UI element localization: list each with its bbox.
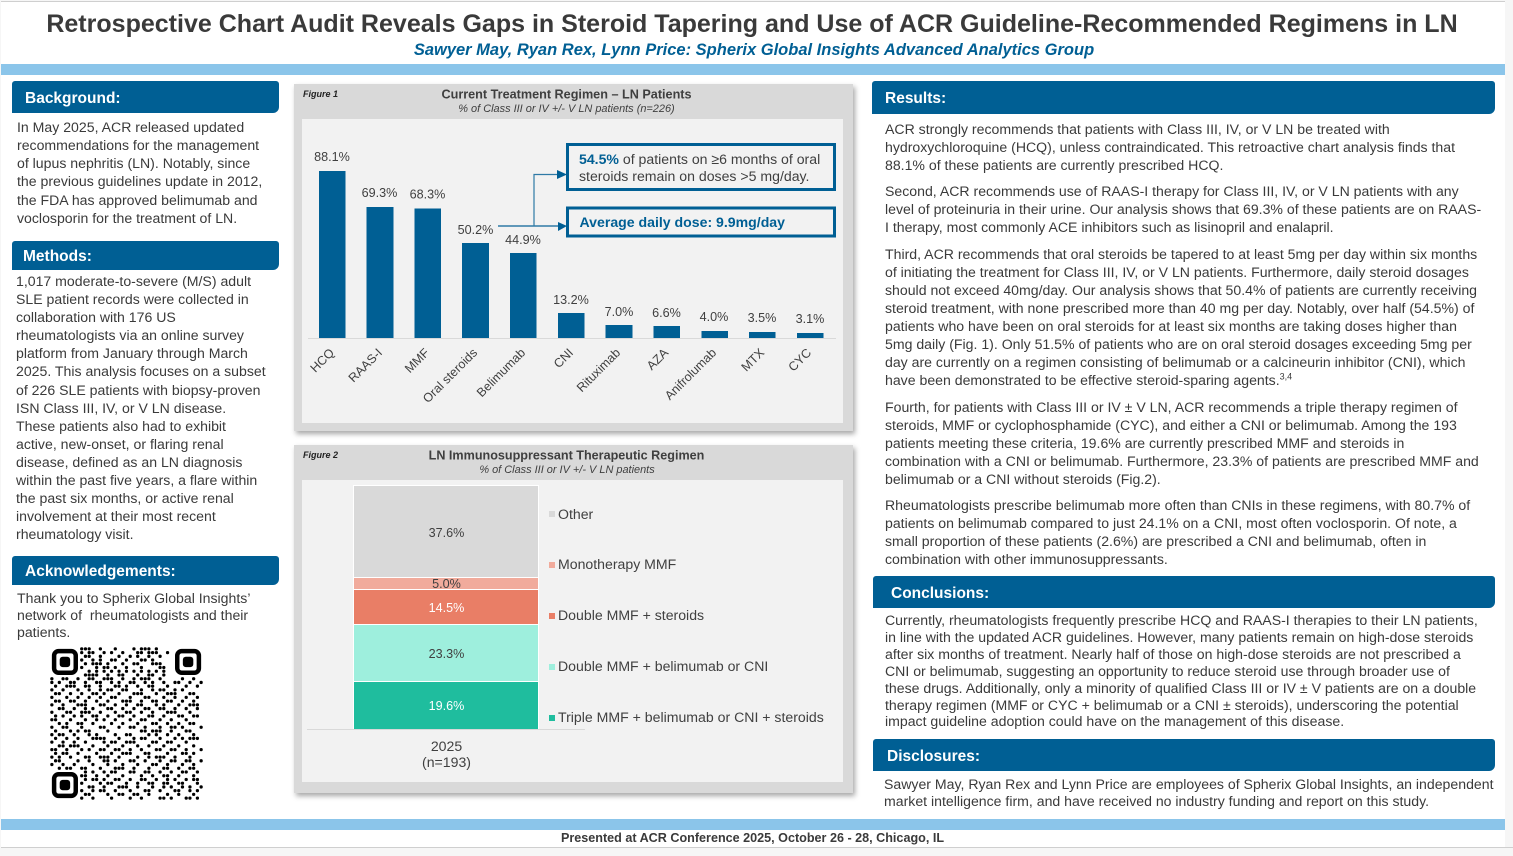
text: methods: active, new-onset, or flaring renal (16, 436, 224, 452)
text: methods: These patients also had to exhibit (16, 418, 226, 434)
category labels: CYC (786, 346, 814, 374)
text: conclusions: therapy regimen (MMF or CYC + belimumab or a CNI ± steroids), underscoring the potential (885, 697, 1459, 713)
text: methods: ISN Class III, IV, or V LN disease. (16, 400, 226, 416)
text: conclusions: these drugs. Additionally, only a minority of qualified Class III or IV ± V patients are on a double (885, 680, 1476, 696)
text: methods: the past six months, or active renal (16, 490, 234, 506)
segment labels: 5.0% (432, 577, 461, 591)
figure 2 label: Figure 2 (303, 450, 338, 460)
text: disclosures: market intelligence firm, and have received no industry funding and report on this study. (884, 793, 1429, 809)
text: background: recommendations for the management (17, 137, 259, 153)
heading: methods: Methods: (23, 248, 92, 265)
stacked bar (354, 486, 538, 730)
category labels: CNI (551, 346, 576, 371)
figure 1 title: Current Treatment Regimen – LN Patients (441, 88, 692, 102)
segment labels: 14.5% (429, 601, 464, 615)
bar value labels: 3.5% (748, 311, 776, 325)
panel: figure 1 (294, 84, 853, 431)
category labels: AZA (644, 345, 672, 373)
panel: figure 2 (294, 445, 853, 793)
category labels: Anifrolumab (662, 346, 719, 403)
text: results: hydroxychloroquine (HCQ), unless contraindicated. This retroactive chart analysis finds that (885, 139, 1455, 155)
segment labels: 19.6% (429, 699, 464, 713)
bar value labels: 3.1% (796, 312, 824, 326)
segment labels (429, 526, 464, 713)
callout: steroid doses (568, 144, 834, 190)
text: results (885, 121, 1481, 567)
legend: Double MMF + steroids (558, 607, 704, 623)
chart: immunosuppressant regimen: (n=193) (422, 754, 471, 770)
category labels: MTX (739, 345, 768, 374)
text: background: of lupus nephritis (LN). Notably, since (17, 155, 250, 171)
text: methods: disease, defined as an LN diagnosis (16, 454, 242, 470)
legend: Double MMF + belimumab or CNI (558, 658, 768, 674)
text: results: steroid treatment, with none prescribed more than 40 mg per day. Notably, over half (54.5%) of (885, 300, 1474, 316)
bar value labels: 7.0% (605, 305, 633, 319)
text: background (17, 119, 262, 226)
text: methods: SLE patient records were collected in (16, 291, 249, 307)
text: conclusions: Currently, rheumatologists frequently prescribe HCQ and RAAS-I therapies to their LN patients, (885, 612, 1478, 628)
text: results: combination with a CNI or belimumab. Furthermore, 23.3% of patients are prescribed MMF and (885, 453, 1479, 469)
text: results: small proportion of these patients (2.6%) are prescribed a CNI and belimumab, often in (885, 533, 1426, 549)
bar value labels: 68.3% (410, 188, 445, 202)
text: methods: of 226 SLE patients with biopsy-proven (16, 382, 260, 398)
bar value labels (314, 150, 824, 326)
figure 2 title: LN Immunosuppressant Therapeutic Regimen (429, 448, 704, 462)
bar value labels: 4.0% (700, 310, 728, 324)
text: results: 5mg daily (Fig. 1). Only 51.5% of patients who are on oral steroid dosages exceeding 5mg per (885, 336, 1472, 352)
text: results: should not exceed 40mg/day. Our analysis shows that 50.4% of patients are currently receiving (885, 282, 1477, 298)
text: disclosures: Sawyer May, Ryan Rex and Lynn Price are employees of Spherix Global Insights, an independent (884, 776, 1494, 792)
heading: results: Results: (885, 90, 946, 107)
category labels: Belimumab (474, 346, 528, 400)
heading: background (12, 81, 279, 113)
text: methods (16, 273, 266, 542)
text: acknowledgements (17, 590, 250, 640)
text: acknowledgements: Thank you to Spherix Global Insights’ (17, 590, 250, 606)
bar value labels: 69.3% (362, 186, 397, 200)
text: results: steroids, MMF or cyclophosphamide (CYC), and either a CNI or belimumab. Among the 193 (885, 417, 1457, 433)
text: conclusions: in line with the updated ACR guidelines. However, many patients remain on high-dose steroids (885, 629, 1473, 645)
text: results: of initiating the treatment for Class III, IV, or V LN patients. Furthermore, daily steroid dosages (885, 264, 1469, 280)
figure 2 subtitle: % of Class III or IV +/- V LN patients (479, 464, 655, 476)
text: results: I therapy, most commonly ACE inhibitors such as lisinopril and enalapril. Third, ACR recommends that oral steroids be tapered to at least 5mg per day within six months (885, 219, 1477, 262)
heading: disclosures: Disclosures: (887, 748, 980, 765)
text: disclosures (884, 776, 1494, 809)
text: methods: within the past five years, a flare within (16, 472, 257, 488)
bar value labels: 44.9% (505, 233, 541, 247)
bottom band (1, 819, 1505, 830)
chart: current treatment regimen (302, 88, 843, 423)
heading: results (872, 81, 1495, 114)
text: acknowledgements: patients. (17, 624, 70, 640)
text: results: patients on belimumab compared to just 24.1% on a CNI, most often voclosporin. Of note, a (885, 515, 1457, 531)
text: methods: rheumatology visit. (16, 526, 134, 542)
text: results: ACR strongly recommends that patients with Class III, IV, or V LN be treated with (885, 121, 1390, 137)
heading: acknowledgements (12, 556, 279, 585)
segment labels: 37.6% (429, 526, 464, 540)
bar value labels: 13.2% (553, 293, 589, 307)
text: results: combination with other immunosuppressants. (885, 551, 1168, 567)
bars (319, 171, 824, 338)
heading: conclusions: Conclusions: (891, 585, 989, 602)
heading: methods (12, 241, 279, 270)
heading: background: Background: (25, 90, 121, 107)
footer: Presented at ACR Conference 2025, October 26 - 28, Chicago, IL (561, 831, 944, 845)
authors: Sawyer May, Ryan Rex, Lynn Price: Spherix Global Insights Advanced Analytics Group (414, 41, 1094, 59)
text: methods: 1,017 moderate-to-severe (M/S) adult (16, 273, 251, 289)
category labels: Oral steroids (420, 346, 480, 406)
legend: Triple MMF + belimumab or CNI + steroids (558, 709, 824, 725)
figure 1 subtitle: % of Class III or IV +/- V LN patients (n=226) (458, 103, 675, 115)
text: methods: rheumatologists via an online survey (16, 327, 244, 343)
category labels: RAAS-I (346, 346, 385, 385)
category labels: HCQ (308, 346, 337, 375)
text: results: patients who have been on oral steroids for at least six months are taking doses higher than (885, 318, 1457, 334)
callout: steroid doses: steroids remain on doses >5 mg/day. (579, 168, 809, 184)
callout: steroid doses: 54.5% of patients on ≥6 months of oral (579, 151, 820, 167)
text: methods: collaboration with 176 US (16, 309, 176, 325)
text: conclusions: after six months of treatment. Nearly half of those on high-dose steroids are not prescribed a (885, 646, 1461, 662)
heading: conclusions (873, 576, 1495, 608)
text: results: belimumab or a CNI without steroids (Fig.2). Rheumatologists prescribe belimumab more often than CNIs in these regimens, with 80.7% of (885, 471, 1470, 513)
text: results: patients meeting these criteria, 19.6% are currently prescribed MMF and steroids in (885, 435, 1404, 451)
chart: immunosuppressant regimen (302, 448, 843, 782)
text: background: In May 2025, ACR released updated (17, 119, 244, 135)
bar value labels: 6.6% (652, 306, 681, 320)
text: methods: platform from January through March (16, 345, 248, 361)
category labels: Rituximab (574, 346, 623, 395)
arrows to callouts (498, 170, 567, 231)
text: results: have been demonstrated to be effective steroid-sparing agents.3,4 Fourth, for patients with Class III or IV ± V LN, ACR recommends a triple therapy regimen of (885, 372, 1458, 415)
category labels (308, 345, 814, 406)
icon: QR code (50, 647, 203, 800)
heading: disclosures (873, 739, 1495, 771)
axis label: 2025 (431, 738, 462, 754)
text: conclusions: CNI or belimumab, suggesting an opportunity to reduce steroid use through broader use of (885, 663, 1450, 679)
plot background (302, 480, 843, 782)
category labels: MMF (402, 345, 432, 376)
segment labels: 23.3% (429, 647, 464, 661)
plot background (302, 119, 843, 423)
text: results: 88.1% of these patients are currently prescribed HCQ. Second, ACR recommends use of RAAS-I therapy for Class III, IV, or V LN patients with any (885, 157, 1459, 199)
text: background: the FDA has approved belimumab and (17, 192, 258, 208)
bar value labels: 88.1% (314, 150, 350, 164)
footer rule (1, 847, 1513, 848)
callout: average daily dose (568, 208, 834, 236)
text: background: voclosporin for the treatment of LN. (17, 210, 237, 226)
text: acknowledgements: network of rheumatologists and their (17, 607, 248, 623)
text: results: day are currently on a regimen consisting of belimumab or a calcineurin inhibitor (CNI), which (885, 354, 1465, 370)
legend (549, 506, 824, 725)
legend: Other (558, 506, 594, 522)
heading: acknowledgements: Acknowledgements: (25, 563, 176, 580)
figure 1 label: Figure 1 (303, 89, 338, 99)
bar value labels: 50.2% (458, 223, 493, 237)
top band (1, 64, 1505, 75)
text: results: level of proteinuria in their urine. Our analysis shows that 69.3% of these patients are on RAAS- (885, 201, 1481, 217)
text: methods: involvement at their most recent (16, 508, 216, 524)
legend: Monotherapy MMF (558, 556, 677, 572)
text: conclusions (885, 612, 1478, 729)
text: methods: 2025. This analysis focuses on a subset (16, 363, 266, 379)
text: background: the previous guidelines update in 2012, (17, 173, 262, 189)
callout: average daily dose: Average daily dose: 9.9mg/day (580, 214, 785, 230)
title: Retrospective Chart Audit Reveals Gaps in Steroid Tapering and Use of ACR Guideline-Recommended Regimens in LN (46, 10, 1458, 38)
text: conclusions: impact guideline adoption could have on the management of this disease. (885, 713, 1344, 729)
